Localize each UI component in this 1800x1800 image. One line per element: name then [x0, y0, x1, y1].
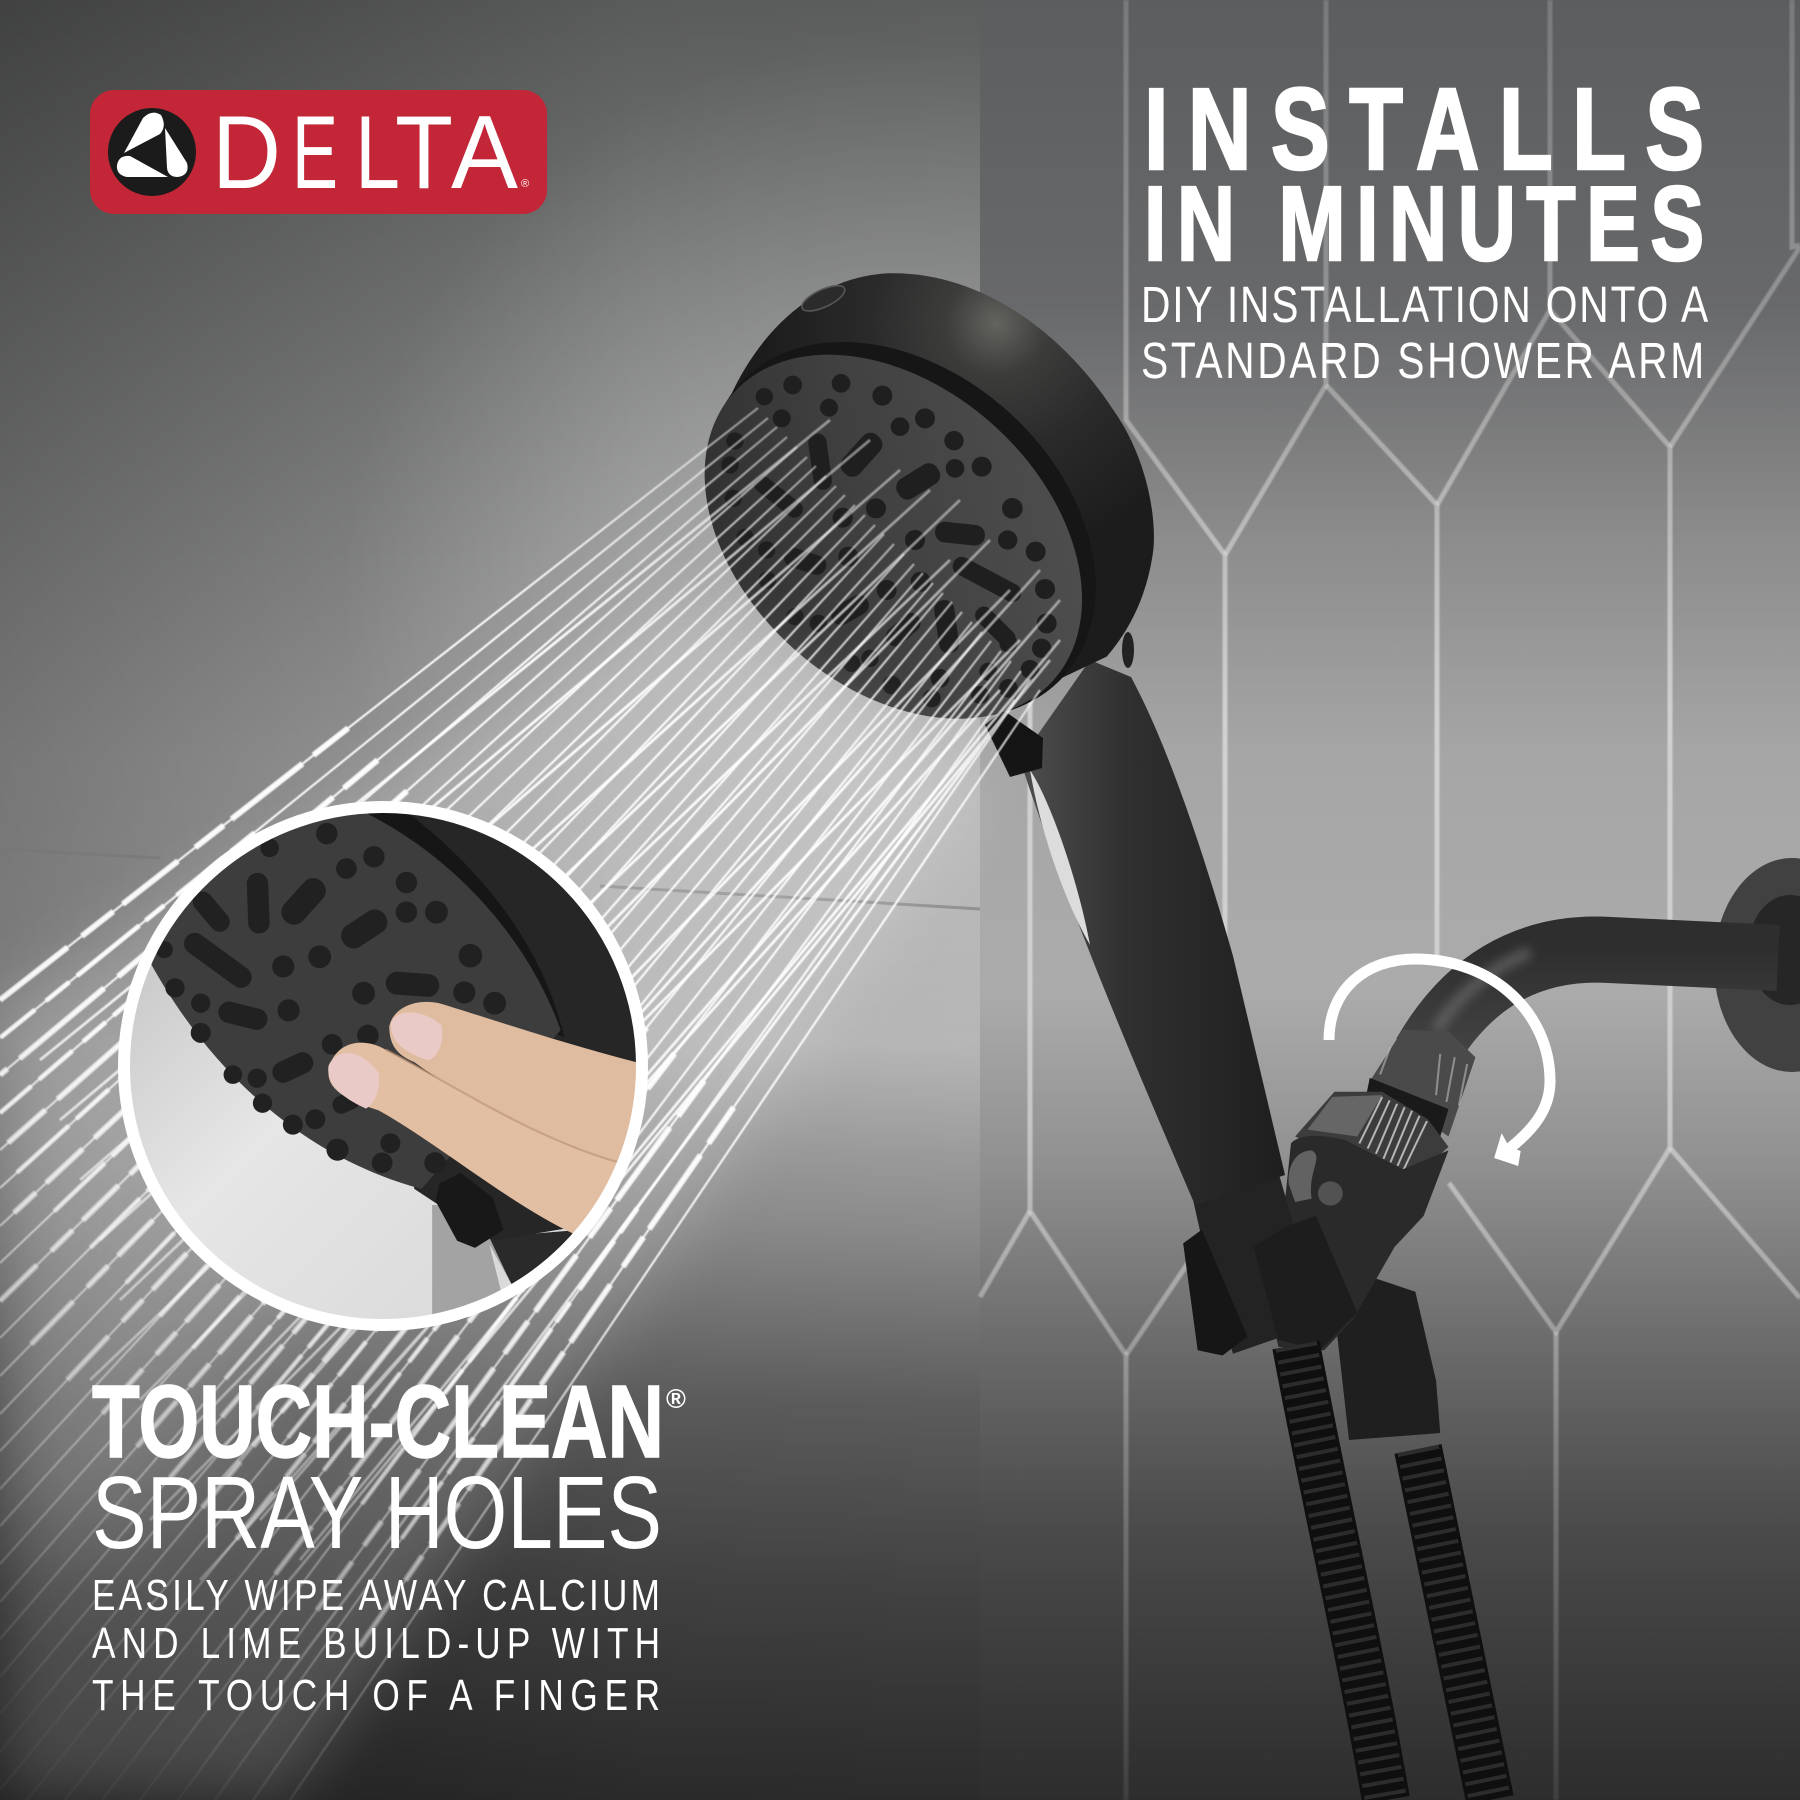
inset circle: touch-clean close-up [124, 801, 650, 1334]
close-up handle [490, 1230, 573, 1284]
flexible hoses [1296, 1345, 1490, 1800]
top button [799, 281, 848, 316]
close-up slots [180, 873, 440, 1117]
arm pipe [1425, 950, 1778, 1055]
spray fine streams [0, 408, 1040, 1800]
rim [633, 265, 1171, 794]
installation description [1141, 276, 1708, 389]
shower head [633, 265, 1171, 794]
face [633, 281, 1153, 792]
wordmark: A [451, 95, 519, 211]
wordmark: L [355, 95, 400, 211]
wordmark: E [292, 95, 338, 211]
lower finger [328, 1043, 621, 1235]
clip wing [1183, 1230, 1247, 1355]
swivel connector and holder [1183, 1030, 1475, 1440]
back shell [713, 273, 1154, 717]
touch-clean description: AND LIME BUILD-UP WITH [92, 1619, 660, 1668]
left wall background [0, 0, 980, 1800]
button on side [1122, 632, 1134, 668]
lower connector [1337, 1271, 1440, 1440]
close-up toggle [436, 1173, 504, 1248]
installs in minutes heading: IN MINUTES [1144, 164, 1704, 283]
wordmark: T [395, 95, 453, 211]
handle highlight [1030, 770, 1090, 945]
spray holes [721, 374, 1057, 707]
touch-clean heading [92, 1364, 686, 1570]
spray bright bank lower left [0, 1020, 360, 1560]
upper finger [389, 1002, 636, 1162]
right tiled wall [980, 0, 1800, 1800]
touch-clean description [92, 1571, 660, 1720]
hose one [1296, 1345, 1386, 1800]
installation description: DIY INSTALLATION ONTO A [1141, 276, 1708, 333]
touch-clean heading: SPRAY HOLES [92, 1455, 662, 1570]
Delta logo badge [90, 90, 547, 214]
wall flange [1714, 858, 1800, 1072]
wordmark [212, 95, 519, 211]
nails [391, 1012, 442, 1060]
spray toggle [985, 710, 1043, 777]
touch-clean heading: TOUCH-CLEAN [92, 1364, 664, 1479]
inset white ring [124, 807, 642, 1325]
spray slots [751, 429, 1024, 654]
water spray [0, 408, 1060, 1800]
background column [432, 1205, 508, 1314]
registered mark: ® [521, 178, 529, 190]
spray soft glow [0, 600, 985, 1800]
hose two [1418, 1449, 1490, 1800]
installs in minutes heading [1144, 64, 1704, 283]
shower arm and flange [1425, 858, 1800, 1072]
spray broken far streams [0, 408, 1030, 1800]
installs in minutes heading: INSTALLS [1144, 64, 1704, 194]
knurled nut [1295, 1092, 1449, 1185]
close-up rim [364, 812, 564, 1037]
touch-clean description: THE TOUCH OF A FINGER [92, 1671, 660, 1720]
spray broken mid streams [0, 418, 1021, 1800]
wordmark: D [212, 95, 281, 211]
installation description: STANDARD SHOWER ARM [1141, 332, 1704, 389]
touch-clean description: EASILY WIPE AWAY CALCIUM [92, 1571, 660, 1620]
upper nut [1370, 1030, 1475, 1137]
hand shower handle [985, 632, 1285, 1205]
close-up shell [364, 801, 643, 1241]
swivel body [1254, 1136, 1449, 1350]
touch-clean heading: ® [666, 1384, 686, 1414]
close-up handle highlight [490, 1245, 512, 1290]
rotation arrow [1329, 959, 1550, 1164]
close-up holes [156, 823, 506, 1174]
logo mark [108, 108, 196, 196]
handle collar [1194, 1173, 1293, 1354]
spray streams across face [40, 420, 1060, 1700]
finger crease [386, 1050, 618, 1162]
close-up face [136, 801, 561, 1189]
